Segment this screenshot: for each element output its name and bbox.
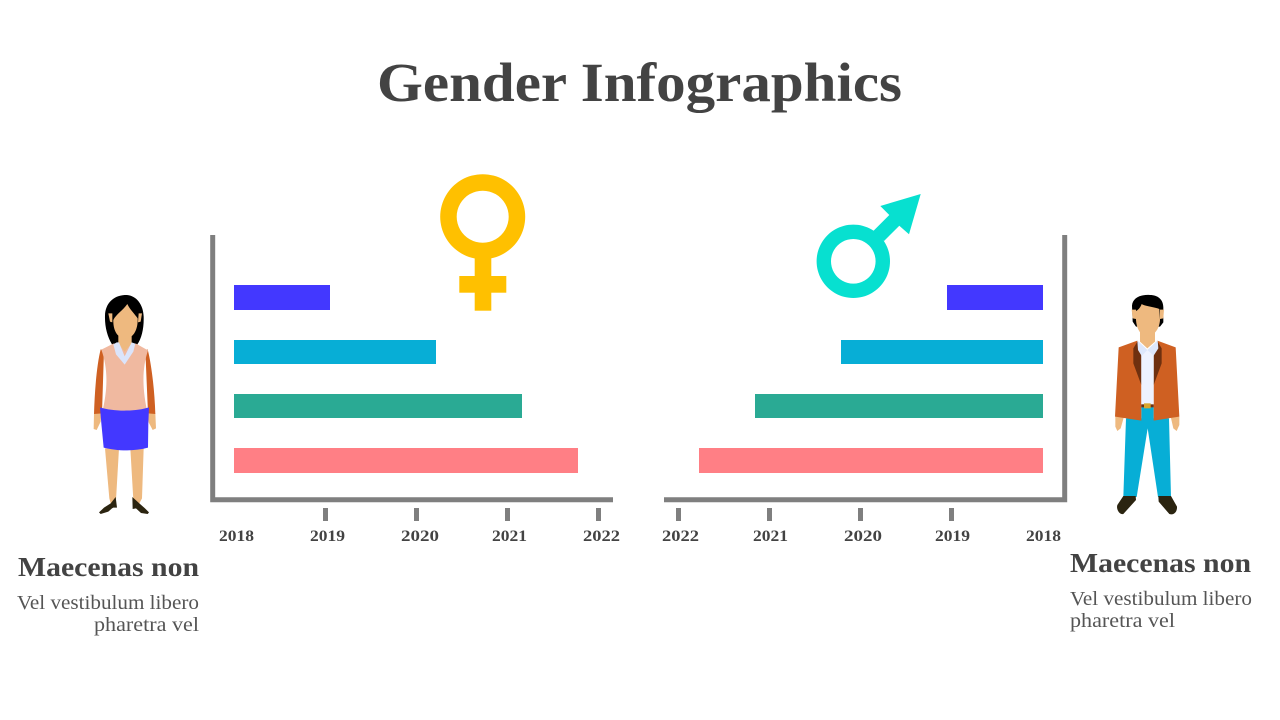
jacket	[1115, 341, 1179, 421]
jacket lining	[1133, 342, 1162, 385]
icon: male symbol	[817, 194, 921, 298]
body: man caption	[1070, 589, 1252, 632]
axis labels: male chart	[662, 528, 1061, 545]
neck and ears	[1132, 310, 1164, 348]
body: woman caption	[17, 593, 200, 636]
axis labels: female chart: 2019	[310, 528, 345, 545]
hair	[1132, 295, 1163, 327]
bars: male data	[699, 285, 1043, 473]
ears and neck	[108, 313, 142, 352]
axis ticks: female chart	[323, 508, 601, 521]
body: woman caption: pharetra vel	[94, 615, 200, 636]
axis ticks: male chart	[676, 508, 954, 521]
heading: woman caption: Maecenas non	[18, 552, 199, 582]
axis labels: male chart: 2022	[662, 528, 699, 545]
axis labels: male chart: 2021	[753, 528, 788, 545]
heading: man caption: Maecenas non	[1070, 548, 1251, 578]
top	[101, 344, 148, 413]
axis labels: male chart: 2018	[1026, 528, 1061, 545]
axis: female chart	[213, 235, 613, 500]
trousers	[1123, 405, 1171, 497]
axis labels: male chart: 2020	[844, 528, 882, 545]
bars: female data	[234, 285, 578, 473]
shirt collar	[1137, 340, 1158, 356]
belt	[1141, 403, 1154, 408]
figure: man	[1115, 295, 1179, 514]
sleeves	[94, 349, 155, 414]
body: man caption: pharetra vel	[1070, 611, 1176, 632]
figure: woman	[94, 295, 156, 514]
axis labels: male chart: 2019	[935, 528, 970, 545]
shoes	[99, 497, 149, 514]
hands	[94, 413, 156, 430]
axis labels: female chart	[219, 528, 620, 545]
axis: male chart	[664, 235, 1065, 500]
body: woman caption: Vel vestibulum libero	[17, 593, 199, 614]
shirt	[1137, 341, 1158, 404]
body: man caption: Vel vestibulum libero	[1070, 589, 1252, 610]
axis labels: female chart: 2021	[492, 528, 527, 545]
axis labels: female chart: 2022	[583, 528, 620, 545]
shoes	[1117, 496, 1177, 514]
chart: female bars	[213, 235, 620, 545]
legs	[105, 448, 144, 503]
icon: female symbol	[440, 174, 525, 311]
hair	[105, 295, 144, 344]
collar	[113, 342, 135, 365]
title: Gender Infographics	[377, 52, 902, 113]
axis labels: female chart: 2018	[219, 528, 254, 545]
face	[1136, 304, 1160, 336]
hands	[1115, 417, 1179, 431]
chart: male bars	[662, 235, 1065, 545]
text block: woman caption	[17, 552, 200, 636]
text block: man caption	[1070, 548, 1252, 632]
axis labels: female chart: 2020	[401, 528, 439, 545]
face	[113, 304, 138, 338]
skirt	[100, 407, 149, 450]
